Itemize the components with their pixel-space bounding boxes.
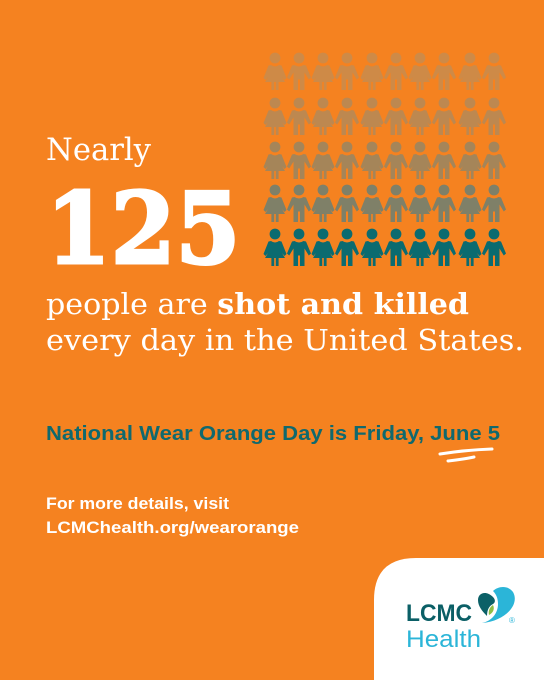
registered mark: ®	[509, 616, 515, 625]
date line: National Wear Orange Day: National Wear Orange Day is Friday, June 5	[46, 422, 500, 445]
text: Nearly: Nearly	[46, 132, 151, 168]
big number: 125: 125	[46, 171, 240, 287]
call to action text: For more details, visit	[46, 494, 229, 513]
headline statement: every day in the United States.	[46, 323, 524, 357]
call to action text	[46, 494, 299, 537]
pictogram: grid of 50 people fading from orange to teal	[264, 53, 506, 266]
underline scribble	[440, 449, 492, 461]
icon: dark heart	[478, 593, 495, 616]
icon: blue heart swoosh	[482, 587, 515, 623]
wordmark: LCMC: LCMC	[406, 600, 472, 627]
headline statement	[46, 287, 524, 357]
wordmark: Health: Health	[406, 626, 481, 653]
logo panel	[374, 558, 544, 680]
headline statement: people are shot and killed	[46, 287, 469, 321]
logo: LCMC Health	[406, 587, 515, 653]
call to action text: LCMChealth.org/wearorange	[46, 518, 299, 537]
icon: green leaf	[489, 605, 494, 615]
